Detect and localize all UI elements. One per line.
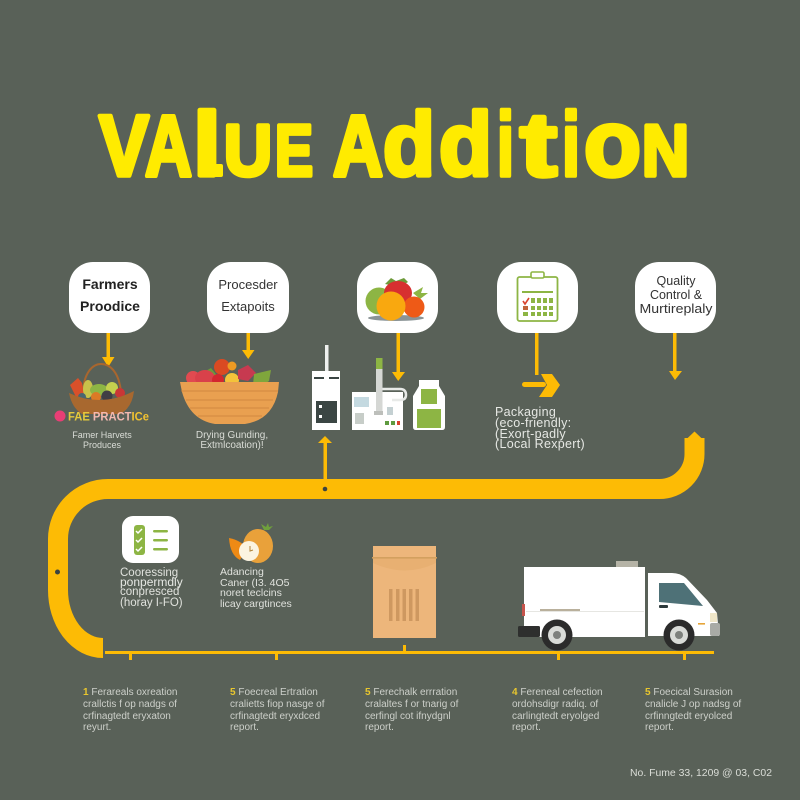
text: compressing: (horay I-FO) [120, 597, 183, 609]
card: processor extracts [207, 262, 289, 333]
card: processor extracts: Extapoits [221, 299, 275, 314]
icon: small fruit basket [69, 364, 134, 414]
note 5: crfinngtedt eryolced [645, 711, 732, 722]
note 1 [83, 687, 178, 733]
icon: delivery van [518, 561, 720, 650]
note 1: reyurt. [83, 722, 111, 733]
title: d [439, 96, 492, 196]
card: fruit icon [357, 262, 438, 333]
text: farmer harvests [72, 430, 132, 450]
title: A [145, 98, 192, 194]
note 1: crfinagtedt eryxaton [83, 711, 171, 722]
title: o [584, 90, 641, 196]
title: A [333, 98, 383, 194]
icon: large fruit basket [180, 359, 279, 424]
text: drying grinding extraction [196, 430, 268, 451]
note 2: 5 Foecreal Ertration [230, 687, 318, 698]
note 2: cralietts fiop nasge of [230, 699, 325, 710]
title: N [642, 112, 689, 192]
text: compressing: Cooressing [120, 567, 178, 579]
note 3 [365, 687, 459, 733]
text: compressing [120, 567, 183, 609]
note 4: carlingtedt eryolged [512, 711, 599, 722]
text: compressing: ponpermdly [120, 575, 183, 589]
icon: tall machine [312, 345, 340, 430]
card: checklist calendar icon [497, 262, 578, 333]
text: packaging: Packaging [495, 405, 556, 419]
note 3: 5 Ferechalk errration [365, 687, 457, 698]
note 5: cnalicle J op nadsg of [645, 699, 741, 710]
text: advancing: noret teclcins [220, 587, 282, 599]
text: drying grinding extraction: Drying Gunding, [196, 430, 268, 441]
arrow: processor to basket [242, 333, 254, 359]
text: packaging: (Exort-padly [495, 427, 566, 441]
arrow: quality control [669, 333, 682, 380]
text: drying grinding extraction: Extmlcoation)! [200, 440, 264, 451]
note 3: report. [365, 722, 394, 733]
card: quality control: Quality [657, 274, 696, 288]
title: i [562, 96, 580, 196]
arrow: calendar to packaging [522, 333, 560, 397]
note 4: ordohsdigr radiq. of [512, 699, 598, 710]
text: advancing: Caner (I3. 4O5 [220, 577, 290, 589]
text: packaging: (Local Rexpert) [495, 437, 585, 451]
text: farmer harvests: Famer Harvets [72, 430, 132, 440]
card: quality control [635, 262, 716, 333]
note 4 [512, 687, 603, 733]
text: compressing: conpresced [120, 586, 179, 598]
card: farmers produce: Proodice [80, 298, 140, 314]
footer reference: No. Fume 33, 1209 @ 03, C02 [630, 767, 772, 779]
title: i [497, 96, 514, 196]
icon: kraft bag [372, 546, 437, 638]
title: l [193, 96, 221, 196]
label: farm practice: FAE PRACTICe [68, 412, 149, 424]
note 4: 4 Fereneal cefection [512, 687, 603, 698]
card: quality control: Murtireplaly [640, 302, 713, 316]
note 5: report. [645, 722, 674, 733]
text: packaging: (eco-friendly: [495, 416, 571, 430]
title: E [275, 112, 313, 192]
note 3: cerfingl cot ifnydgnl [365, 711, 451, 722]
note 2: report. [230, 722, 259, 733]
note 4: report. [512, 722, 541, 733]
note 3: cralaltes f or tnarig of [365, 699, 459, 710]
note 5 [645, 687, 741, 733]
icon: processing machine [352, 358, 406, 430]
note 1: crallctis f op nadgs of [83, 699, 177, 710]
title: d [383, 96, 435, 196]
card: farmers produce: Farmers [82, 276, 138, 292]
note 1: 1 Ferareals oxreation [83, 687, 178, 698]
text: advancing [220, 566, 292, 610]
card: farmers produce [69, 262, 150, 333]
icon: checklist [122, 516, 179, 563]
arrow: farmers to basket [102, 333, 114, 367]
title [99, 90, 689, 196]
text: packaging [495, 405, 585, 451]
title: t [520, 96, 557, 196]
text: farmer harvests: Produces [83, 440, 122, 450]
text: advancing: Adancing [220, 566, 264, 578]
card: quality control: Control & [650, 288, 703, 302]
timeline rule with ticks [105, 645, 714, 660]
note 2: crfinagtedt eryxdced [230, 711, 320, 722]
note 5: 5 Foecical Surasion [645, 687, 733, 698]
icon: citrus and pineapple clock [229, 523, 273, 563]
title: V [99, 98, 149, 194]
title: U [224, 112, 272, 192]
arrow: belt to machines [318, 436, 332, 481]
arrow: fruit to machines [392, 333, 405, 381]
flow belt arrow [55, 432, 704, 648]
text: advancing: licay cargtinces [220, 598, 292, 610]
icon: bottle [413, 380, 445, 430]
card: processor extracts: Procesder [218, 277, 278, 292]
note 2 [230, 687, 325, 733]
